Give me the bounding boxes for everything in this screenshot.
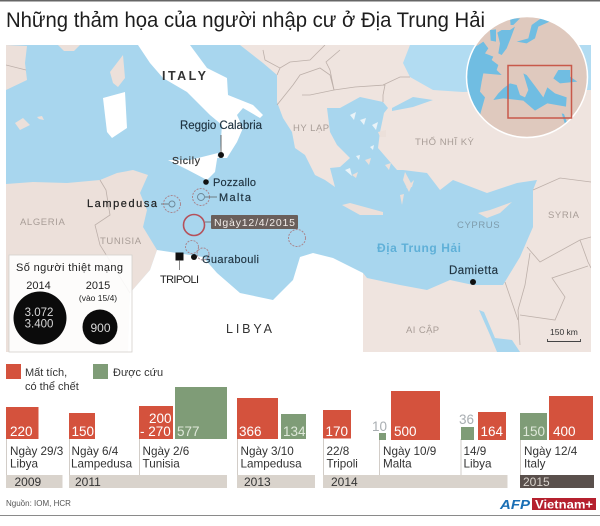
bar group: 6/4 Lampedusa: 150 [72, 424, 94, 439]
country labels: LIBYA [226, 322, 273, 336]
marker: Tripoli [160, 252, 198, 283]
aegean sea islets [345, 112, 378, 176]
scale bar: 150 km [550, 327, 578, 337]
bar group: 29/3 Libya: Libya [10, 458, 38, 470]
land: Algeria and Tunisia [6, 170, 157, 352]
year band: 2015 [520, 475, 594, 489]
country labels: ALGERIA [20, 217, 65, 228]
bar group: 2/6 Tunisia: 200 [149, 411, 172, 426]
bar group: 29/3 Libya: Ngày 29/3 [10, 445, 63, 458]
bar group: 10/9 Malta: 500 [394, 424, 417, 439]
land: Balearic Islands [15, 118, 30, 130]
land: Corsica [110, 55, 125, 87]
year band: 2009 [6, 475, 62, 489]
land: Libya [128, 250, 363, 352]
bar group: 14/9 Libya: 14/9 [464, 445, 486, 458]
bar group: 2/6 Tunisia: 577 [177, 424, 200, 439]
bar group: 14/9 Libya: 36 [459, 412, 474, 427]
marker: Reggio Calabria [180, 120, 263, 158]
bar group: 22/8 Tripoli: 22/8 [326, 445, 349, 458]
panel: death toll: 2015 [86, 280, 110, 292]
country labels: HY LẠP [293, 123, 330, 134]
bar group: 29/3 Libya [6, 407, 63, 470]
bar group: 6/4 Lampedusa: Ngày 6/4 [72, 445, 119, 458]
bar group: 22/8 Tripoli: Tripoli [326, 458, 358, 470]
marker: 12/4/2015 shipwreck [184, 214, 298, 236]
legend: Mất tích, [25, 367, 67, 379]
stems [6, 439, 520, 476]
year band: 2009: 2009 [14, 475, 42, 489]
year band: 2014: 2014 [331, 475, 358, 489]
panel: death toll: 2014 [26, 280, 51, 292]
source: Nguồn: IOM, HCR [6, 499, 71, 508]
year band: 2011 [69, 475, 227, 489]
bar group: 3/10 Lampedusa: 366 [239, 424, 262, 439]
year band: 2014 [323, 475, 508, 489]
country labels: Địa Trung Hải [377, 241, 461, 255]
bar group: 12/4 Italy: 400 [553, 424, 576, 439]
bar group: 12/4 Italy: 150 [522, 424, 545, 439]
bar group: 10/9 Malta: Ngày 10/9 [383, 445, 436, 458]
scale bar [548, 327, 580, 342]
land: France and Spain [6, 45, 27, 90]
country labels: CYPRUS [457, 220, 500, 231]
inset: locator globe [466, 17, 588, 138]
land: Sardinia [103, 92, 127, 138]
marker: Malta: Malta [219, 192, 252, 204]
land: Italy [138, 45, 263, 158]
legend [6, 364, 163, 393]
circle: 2014 [14, 292, 66, 344]
year band: 2015: 2015 [523, 475, 550, 489]
country labels: AI CẬP [406, 325, 440, 336]
logo: AFP: AFP [499, 497, 530, 512]
marker: Lampedusa [87, 196, 180, 212]
bar group: 3/10 Lampedusa [237, 398, 306, 470]
bar group: 3/10 Lampedusa: Ngày 3/10 [240, 445, 294, 458]
marker: Guarabouli [186, 240, 259, 266]
marker: Reggio Calabria: Reggio Calabria [180, 120, 263, 132]
circle: 2015: 900 [90, 321, 111, 335]
bar group: 14/9 Libya: 164 [480, 424, 504, 439]
marker: Damietta [449, 265, 499, 285]
sea: Gulf of Suez and Aqaba [479, 310, 520, 352]
marker: Guarabouli: Guarabouli [202, 254, 259, 266]
bar group: 14/9 Libya: Libya [464, 458, 492, 470]
marker: Pozzallo [203, 178, 256, 186]
circle: 2014: 3.072 [25, 307, 53, 319]
bar group: 2/6 Tunisia: Tunisia [142, 458, 180, 470]
country labels: TUNISIA [100, 236, 142, 247]
marker: Lampedusa: Lampedusa [87, 198, 158, 210]
country labels: SYRIA [548, 210, 580, 221]
bar group: 12/4 Italy: Italy [524, 458, 546, 470]
land: Aegean islands [352, 130, 414, 205]
year band: 2011: 2011 [75, 475, 101, 489]
panel: death toll: (vào 15/4) [79, 293, 117, 303]
country borders [6, 45, 591, 345]
panel: death toll: Số người thiệt mạng [16, 262, 123, 274]
bar group: 2/6 Tunisia: Ngày 2/6 [142, 445, 189, 458]
marker: Pozzallo: Pozzallo [213, 177, 256, 189]
bar group: 14/9 Libya [459, 412, 506, 470]
bar group: 10/9 Malta: Malta [383, 458, 412, 470]
country labels: THỔ NHĨ KỲ [415, 136, 475, 148]
land: Cyprus [478, 202, 512, 218]
legend: có thể chết [25, 381, 79, 393]
bar group: 2/6 Tunisia: - 270 [140, 424, 171, 439]
sea: Black Sea [403, 45, 591, 92]
sea: Sea of Marmara [392, 97, 433, 111]
inset locator rectangle [508, 66, 572, 118]
dashed ring east [288, 230, 306, 246]
title: Những thảm họa của người nhập cư ở Địa Trung Hải [6, 9, 485, 32]
bar group: 29/3 Libya: 220 [10, 424, 33, 439]
country labels: ITALY [162, 69, 207, 83]
bar group: 22/8 Tripoli [323, 410, 358, 470]
marker: Tripoli: TRIPOLI [160, 274, 199, 286]
year band: 2013: 2013 [244, 475, 271, 489]
bar group: 6/4 Lampedusa [69, 413, 133, 470]
country labels [20, 69, 580, 336]
logo: Vietnam+: Vietnam+ [535, 500, 593, 512]
land: Crete [342, 203, 383, 215]
year band: 2013 [237, 475, 315, 489]
panel: death toll [9, 255, 132, 352]
bar group: 22/8 Tripoli: 170 [326, 424, 348, 439]
legend: Được cứu [113, 367, 163, 379]
bar group: 3/10 Lampedusa: 134 [283, 424, 306, 439]
land: Sicily [168, 153, 218, 180]
bar group: 12/4 Italy [520, 396, 593, 470]
bar group: 10/9 Malta: 10 [372, 419, 387, 434]
marker: Damietta: Damietta [449, 265, 499, 277]
marker: 12/4/2015 shipwreck: Ngày12/4/2015 [214, 217, 295, 229]
circle: 2014: 3.400 [25, 318, 53, 330]
country labels: Sicily [172, 155, 201, 167]
bar group: 6/4 Lampedusa: Lampedusa [71, 458, 133, 470]
land: Balkans, Greece, Turkey, Levant, Egypt [240, 45, 591, 352]
bar group: 12/4 Italy: Ngày 12/4 [524, 445, 578, 458]
marker: Malta [192, 188, 252, 206]
bar group: 2/6 Tunisia [139, 387, 227, 470]
map of the Mediterranean [6, 45, 591, 352]
bar group: 3/10 Lampedusa: Lampedusa [240, 458, 302, 470]
bar group: 10/9 Malta [372, 391, 440, 470]
